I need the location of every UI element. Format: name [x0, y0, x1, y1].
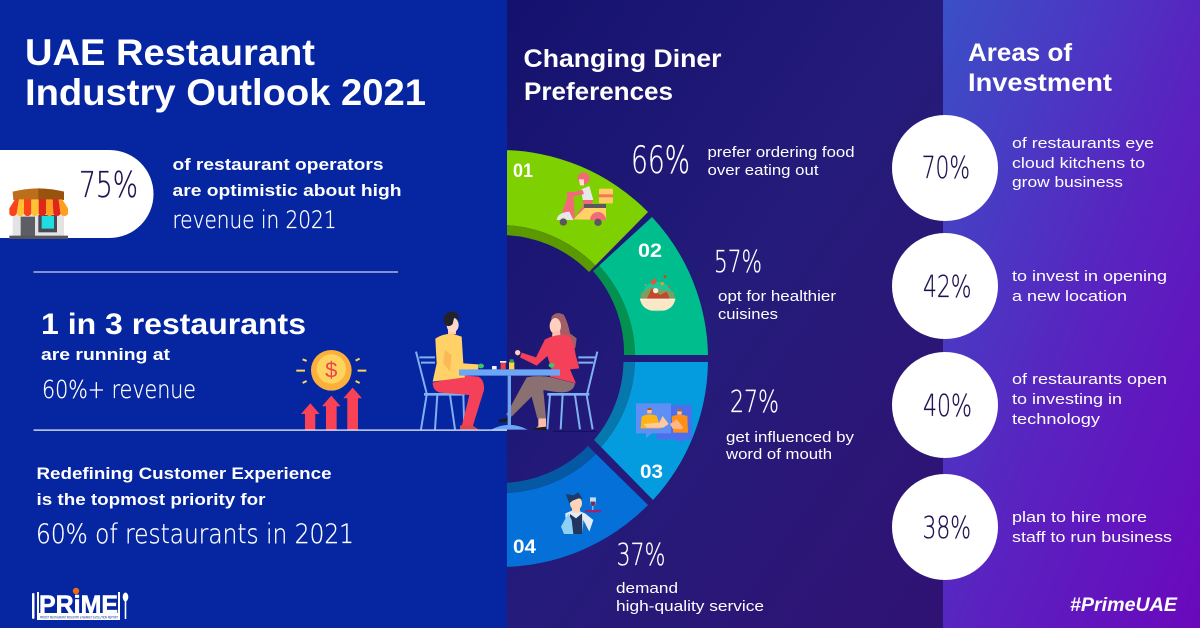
icon: salad bowl — [640, 275, 675, 312]
text block: customer experience priority: Redefining Customer Experience — [36, 464, 332, 483]
text block: customer experience priority: is the topmost priority for — [36, 490, 266, 509]
investment: 38% hire staff: plan to hire more — [1012, 509, 1147, 526]
stat: 66% prefer ordering: prefer ordering food — [708, 144, 854, 161]
title — [25, 32, 426, 113]
text block: 1 in 3 restaurants — [41, 308, 306, 404]
illustration: two diners at a table — [416, 312, 597, 431]
stat: 66% prefer ordering: over eating out — [708, 162, 819, 179]
text block: optimistic operators — [172, 155, 402, 234]
text block: optimistic operators: of restaurant operators — [172, 155, 384, 174]
stat: 27% word of mouth: get influenced by — [726, 429, 855, 446]
text block: optimistic operators: revenue in 2021 — [172, 206, 336, 234]
investment: 40% technology: technology — [1012, 411, 1101, 428]
heading: areas of investment: Investment — [968, 69, 1113, 97]
stat: 37% high-quality service: demand — [616, 580, 678, 597]
hashtag: #PrimeUAE — [1070, 595, 1178, 616]
label 04: 04 — [513, 537, 536, 558]
investment: 42% new location — [892, 233, 1167, 339]
investment: 70% cloud kitchens: cloud kitchens to — [1012, 155, 1145, 172]
segment 04 — [500, 446, 648, 567]
investment: 40% technology — [892, 352, 1167, 458]
investment: 38% hire staff — [892, 474, 1172, 580]
panel: changing diner preferences background — [507, 0, 944, 628]
heading: areas of investment: Areas of — [968, 39, 1073, 67]
text block: 1 in 3 restaurants: are running at — [41, 345, 170, 364]
tableware — [501, 361, 506, 369]
stat: 57% healthier cuisines — [714, 245, 836, 323]
panel: left outlook background — [0, 0, 507, 628]
title: UAE Restaurant — [25, 32, 315, 73]
stat pill: 75%: 75% — [79, 165, 138, 206]
stat: 66% prefer ordering — [631, 139, 854, 182]
title: Industry Outlook 2021 — [25, 72, 426, 113]
icon: coin with rising arrows — [296, 350, 366, 430]
heading: changing diner preferences: Preferences — [524, 78, 673, 106]
investment: 42% new location: a new location — [1012, 288, 1127, 305]
text block: optimistic operators: are optimistic about high — [172, 181, 402, 200]
stat: 57% healthier cuisines: opt for healthier — [718, 288, 836, 305]
stat: 27% word of mouth: 27% — [730, 385, 779, 420]
text block: customer experience priority: 60% of restaurants in 2021 — [36, 519, 354, 550]
investment: 70% cloud kitchens — [892, 115, 1154, 221]
icon: clapping people in speech bubbles — [636, 403, 692, 444]
label 03: 03 — [640, 462, 663, 483]
investment: 42% new location: 42% — [923, 270, 972, 305]
investment: 38% hire staff: 38% — [922, 511, 971, 546]
label 02: 02 — [638, 241, 662, 262]
segment 02 — [593, 217, 708, 355]
heading: changing diner preferences: Changing Diner — [524, 45, 722, 73]
text block: 1 in 3 restaurants: 60%+ revenue — [42, 375, 196, 404]
investment: 38% hire staff: staff to run business — [1012, 529, 1172, 546]
panel: areas of investment background — [943, 0, 1200, 628]
icon: coin with rising arrows: $ — [325, 357, 337, 382]
stat pill: 75% — [0, 150, 154, 239]
stat: 37% high-quality service: 37% — [616, 538, 666, 573]
icon: waiter with tray — [561, 492, 601, 534]
segment 03 — [594, 362, 708, 500]
segment 01 — [500, 150, 648, 272]
table — [459, 369, 560, 376]
stat: 57% healthier cuisines: 57% — [714, 245, 762, 280]
stat: 57% healthier cuisines: cuisines — [718, 306, 778, 323]
right chair — [547, 352, 597, 429]
investment: 70% cloud kitchens: of restaurants eye — [1012, 135, 1154, 152]
stat: 66% prefer ordering: 66% — [631, 139, 690, 182]
investment: 70% cloud kitchens: grow business — [1012, 174, 1123, 191]
investment: 40% technology: 40% — [923, 389, 972, 424]
investment: 70% cloud kitchens: 70% — [922, 151, 970, 186]
stat: 37% high-quality service: high-quality service — [616, 598, 764, 615]
woman: trousers, blouse, head, hair — [550, 313, 577, 348]
investment: 40% technology: to investing in — [1012, 391, 1122, 408]
text block: 1 in 3 restaurants: 1 in 3 restaurants — [41, 308, 306, 341]
stat: 27% word of mouth — [725, 385, 855, 463]
left chair — [416, 352, 465, 429]
donut labels and icons — [513, 161, 692, 558]
icon: delivery scooter — [557, 172, 613, 226]
icon: restaurant storefront — [9, 188, 68, 239]
heading: changing diner preferences — [524, 45, 722, 106]
stat: 27% word of mouth: word of mouth — [725, 446, 832, 463]
text block: customer experience priority — [36, 464, 354, 550]
stat: 37% high-quality service — [616, 538, 764, 615]
logo: PRiME: PRiME — [39, 591, 118, 619]
man: trousers, sweater, head — [433, 375, 484, 427]
label 01: 01 — [513, 161, 533, 182]
heading: areas of investment — [968, 39, 1113, 97]
donut chart: four diner preference segments — [500, 150, 708, 567]
investment: 42% new location: to invest in opening — [1012, 268, 1167, 285]
logo: PRiME: PRODIT RESTAURANT INDUSTRY & MARKET EVOLUTION REPORT — [40, 616, 118, 620]
investment: 40% technology: of restaurants open — [1012, 371, 1167, 388]
